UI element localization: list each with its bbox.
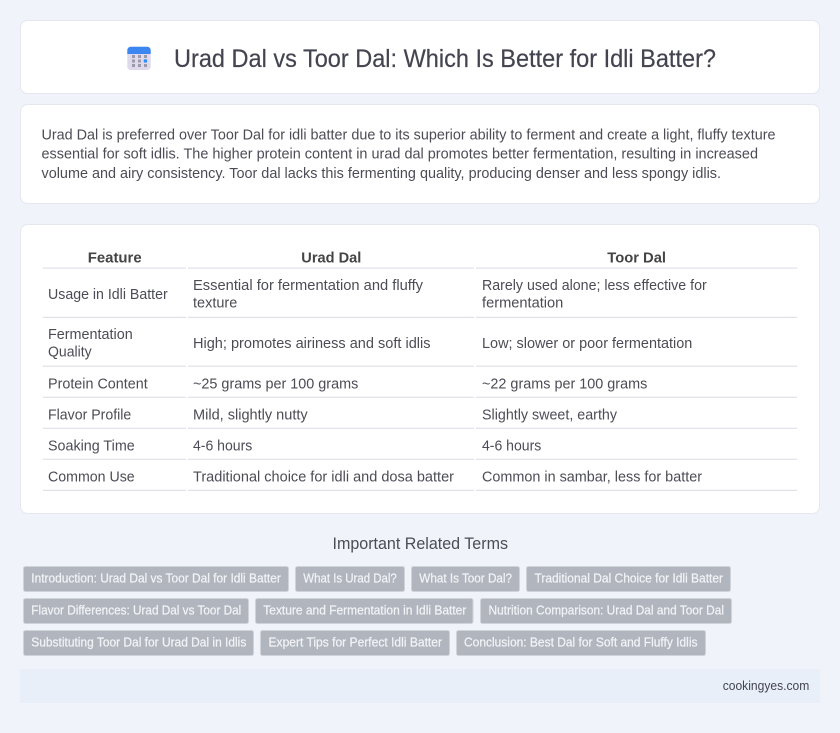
text block: summary: Urad Dal is preferred over Toor Dal for idli batter due to its superior ability to ferment and create a light, fluffy texture [42,127,776,143]
row: protein content: Protein Content [48,376,148,392]
table header: Urad Dal [301,250,361,267]
tag: introduction [24,566,288,592]
row: protein content: ~25 grams per 100 grams [193,376,358,392]
text block: summary [42,127,776,182]
title: Urad Dal vs Toor Dal: Which Is Better for Idli Batter? [174,46,716,73]
footer text: site name: cookingyes.com [723,678,809,693]
row: usage in idli batter: fermentation [482,296,563,312]
table header: Feature [88,250,142,267]
row: protein content: ~22 grams per 100 grams [482,376,647,392]
tag group: related terms [24,566,732,656]
tag: traditional dal choice: Traditional Dal Choice for Idli Batter [534,571,724,586]
panel: comparison table [20,224,820,514]
tag: expert tips [260,630,450,656]
tag: texture and fermentation [256,598,473,624]
row: common use: Common in sambar, less for batter [482,469,702,485]
row: soaking time: 4-6 hours [193,438,252,454]
tag: introduction: Introduction: Urad Dal vs Toor Dal for Idli Batter [31,571,281,586]
tag: conclusion [456,630,706,656]
row: fermentation quality: Low; slower or poor fermentation [482,336,692,352]
row: common use: Traditional choice for idli and dosa batter [193,469,454,485]
row: common use: Common Use [48,469,135,485]
text block: summary: essential for soft idlis. The higher protein content in urad dal promotes better fermentation, resulting in increased [42,147,758,163]
row: soaking time: Soaking Time [48,438,135,454]
row: usage in idli batter: texture [193,296,237,312]
row: fermentation quality: Fermentation [48,327,133,343]
tag: what is toor dal: What Is Toor Dal? [419,571,512,586]
row: fermentation quality: Quality [48,345,92,361]
tag: nutrition comparison [480,598,732,624]
row: flavor profile: Flavor Profile [48,407,131,423]
row: usage in idli batter: Usage in Idli Batter [48,287,168,303]
footer bar [20,669,820,703]
tag: texture and fermentation: Texture and Fermentation in Idli Batter [263,603,467,618]
panel: title card [20,20,820,94]
table header: Toor Dal [607,250,666,267]
row: usage in idli batter: Essential for fermentation and fluffy [193,278,424,294]
tag: flavor differences: Flavor Differences: Urad Dal vs Toor Dal [31,603,241,618]
row: soaking time [48,438,541,454]
tag: what is urad dal: What Is Urad Dal? [303,571,397,586]
row: flavor profile [48,407,618,423]
tag: substituting toor dal: Substituting Toor Dal for Urad Dal in Idlis [31,635,246,650]
tag: substituting toor dal [24,630,254,656]
row: protein content [48,376,647,392]
tag: conclusion: Conclusion: Best Dal for Soft and Fluffy Idlis [464,635,698,650]
panel: summary paragraph [20,104,820,204]
tag: what is urad dal [296,566,404,592]
row: usage in idli batter [48,278,707,312]
row: fermentation quality [48,327,692,361]
tag: traditional dal choice [526,566,730,592]
row: fermentation quality: High; promotes airiness and soft idlis [193,336,430,352]
row: flavor profile: Mild, slightly nutty [193,407,308,423]
tag: nutrition comparison: Nutrition Comparison: Urad Dal and Toor Dal [488,603,724,618]
icon: calendar grid [127,47,151,70]
tag: flavor differences [24,598,248,624]
heading: important related terms: Important Related Terms [332,535,508,553]
table header [88,250,666,267]
tag: expert tips: Expert Tips for Perfect Idli Batter [268,635,443,650]
row: soaking time: 4-6 hours [482,438,541,454]
row: common use [48,469,702,485]
tag: what is toor dal [412,566,520,592]
row: flavor profile: Slightly sweet, earthy [482,407,618,423]
row: usage in idli batter: Rarely used alone; less effective for [482,278,707,294]
text block: summary: volume and airy consistency. Toor dal lacks this fermenting quality, producing denser and less spongy idlis. [42,166,721,182]
